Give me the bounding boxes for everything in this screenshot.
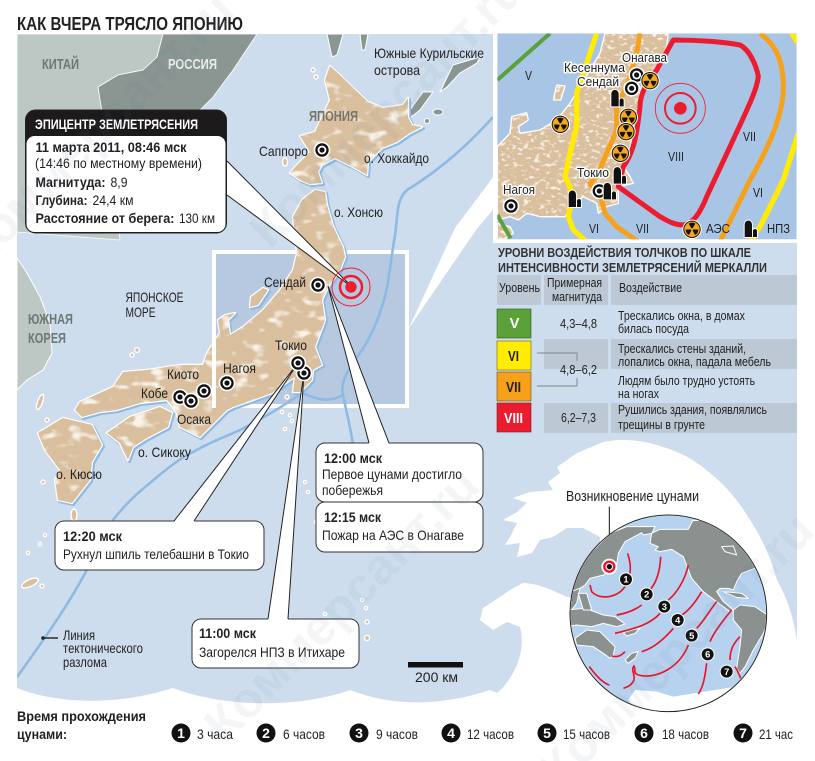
callout: epicentre: Магнитуда:	[36, 174, 106, 190]
inset labels: Кесеннума	[564, 60, 626, 75]
map labels: countries and seas: КИТАЙ	[42, 55, 79, 73]
level VII: VII	[506, 379, 521, 396]
map labels: countries and seas: ЯПОНИЯ	[309, 109, 358, 125]
inset labels: НПЗ	[767, 221, 790, 236]
legend: tectonic fault line: тектонического	[63, 640, 143, 656]
table row shading	[544, 339, 797, 433]
callout: 12:00 and 12:15 events: Пожар на АЭС в Онагаве	[322, 527, 464, 543]
level V	[497, 308, 745, 338]
panel: inset map of the epicentre region	[497, 33, 798, 242]
map labels: countries and seas: РОССИЯ	[168, 57, 217, 73]
globe badges 1-7: 6	[705, 650, 710, 660]
table header row: Уровень	[499, 280, 540, 295]
legend: 18 hours: 18 часов	[662, 726, 709, 742]
city: Нагоя: Нагоя	[223, 360, 256, 376]
callout: 11:00 event	[192, 373, 359, 668]
legend: 9 hours: 3	[355, 725, 363, 741]
legend: 18 hours: 6	[640, 725, 648, 741]
globe badges 1-7: 1	[623, 575, 629, 585]
level V: билась посуда	[618, 321, 690, 336]
map labels: countries and seas: Южные Курильские	[374, 45, 484, 61]
city markers in inset	[503, 67, 645, 214]
white frame around inset	[493, 30, 797, 243]
callout: epicentre: 11 марта 2011, 08:46 мск	[36, 139, 187, 155]
intensity zone VI	[565, 33, 798, 242]
globe heading: Возникновение цунами	[566, 489, 699, 505]
level VIII: 6,2–7,3	[561, 410, 596, 425]
panel: main map	[17, 34, 493, 677]
intensity zone V	[497, 33, 550, 238]
city: Киото: Киото	[167, 366, 199, 382]
globe badges 1-7: 7	[724, 667, 729, 677]
inset labels: VI	[589, 221, 599, 236]
table header row: магнитуда	[552, 289, 603, 304]
map labels: countries and seas: острова	[374, 62, 420, 78]
connector from frame to inset	[409, 172, 497, 328]
legend: 6 hours: 2	[262, 725, 270, 741]
bracket and shared magnitude: 4,8–6,2	[560, 362, 597, 377]
globe ocean	[567, 512, 770, 715]
inset labels: VII	[743, 129, 756, 144]
callout: epicentre: 24,4 км	[92, 192, 134, 208]
inset frame left edge	[212, 340, 216, 408]
globe badges 1-7: 2	[644, 590, 649, 600]
inset labels: Токио	[577, 165, 609, 180]
intensity zone VIII	[618, 40, 758, 225]
inset sea	[497, 33, 797, 239]
map labels: countries and seas: о. Хонсю	[334, 204, 383, 220]
city: Токио: Токио	[275, 337, 307, 353]
city: Осака	[177, 393, 211, 427]
land: Russia	[98, 34, 257, 112]
legend: 12 hours	[442, 724, 514, 742]
map labels: countries and seas: о. Сикоку	[138, 444, 191, 460]
legend: 12 hours: 4	[447, 725, 455, 741]
level VI: VI	[508, 348, 519, 365]
globe land	[567, 520, 770, 673]
city: Киото	[167, 366, 212, 399]
small islands	[20, 68, 370, 641]
globe disc	[570, 515, 767, 712]
callout: 12:20 event: 12:20 мск	[63, 528, 123, 544]
map labels: countries and seas: о. Хоккайдо	[364, 150, 429, 166]
callout: 12:00 and 12:15 events: Первое цунами достигло	[322, 466, 462, 482]
wave: white tsunami shape	[17, 440, 797, 761]
legend heading: tsunami travel time: цунами:	[17, 726, 67, 742]
inset labels: АЭС	[706, 221, 730, 236]
tectonic fault lines	[17, 117, 493, 677]
level V: V	[510, 315, 520, 332]
city: Саппоро: Саппоро	[259, 143, 308, 159]
callout: 12:20 event	[55, 363, 298, 570]
bracket and shared magnitude	[537, 353, 597, 386]
legend: 9 hours: 9 часов	[376, 726, 418, 742]
table header row: Воздействие	[619, 280, 682, 295]
land: Sakhalin and Kuril islands	[327, 34, 480, 124]
level VII: на ногах	[618, 386, 659, 401]
table heading: УРОВНИ ВОЗДЕЙСТВИЯ ТОЛЧКОВ ПО ШКАЛЕ	[498, 245, 751, 260]
level V: Трескались окна, в домах	[618, 308, 745, 323]
callout: epicentre: (14:46 по местному времени)	[35, 155, 202, 171]
legend: 9 hours	[350, 724, 418, 742]
inset labels: V	[525, 68, 532, 83]
Japan coast halo	[38, 66, 422, 503]
epicentre target	[655, 83, 705, 133]
level VII	[497, 372, 755, 401]
map labels: countries and seas: КОРЕЯ	[28, 331, 66, 347]
callout: epicentre: ЭПИЦЕНТР ЗЕМЛЕТРЯСЕНИЯ	[35, 116, 198, 132]
level VI: лопались окна, падала мебель	[618, 354, 771, 369]
city: Нагоя	[219, 360, 256, 391]
globe badges 1-7	[619, 572, 734, 679]
legend: tectonic fault line: разлома	[63, 654, 107, 670]
scale bar	[408, 662, 463, 685]
callout: 11:00 event: Загорелся НПЗ в Итихаре	[199, 644, 345, 660]
inset labels	[503, 50, 790, 236]
inset labels: Сендай	[577, 74, 619, 89]
city: Сендай	[264, 274, 326, 293]
tsunami fronts	[589, 553, 741, 694]
inset frame area	[214, 252, 407, 406]
legend heading: tsunami travel time	[17, 708, 146, 742]
legend: 21 hours: 7	[739, 725, 747, 741]
globe badges 1-7: 5	[689, 631, 694, 641]
level VII: Людям было трудно устоять	[618, 373, 755, 388]
legend: tectonic fault line: Линия	[63, 627, 95, 643]
inset labels: VI	[753, 185, 763, 200]
watermark: Коммерсант.ru	[193, 456, 490, 753]
panel: tsunami globe	[567, 507, 770, 718]
Japan coast glow	[40, 68, 424, 504]
legend: tectonic fault line	[41, 627, 143, 670]
legend: 3 hours: 3 часа	[197, 726, 233, 742]
level V: 4,3–4,8	[560, 316, 597, 331]
scale bar: 200 км	[415, 669, 458, 685]
epicentre target on main map	[332, 268, 370, 306]
callout: epicentre: Расстояние от берега:	[36, 210, 174, 226]
legend: 6 hours	[256, 724, 325, 742]
legend heading: tsunami travel time: Время прохождения	[17, 708, 146, 724]
callout: 12:00 and 12:15 events: 12:00 мск	[324, 450, 383, 466]
globe badges 1-7: 4	[675, 615, 681, 625]
level VIII: Рушились здания, появлялись	[618, 402, 767, 417]
legend: 15 hours	[538, 724, 610, 742]
callout: 12:00 and 12:15 events: 12:15 мск	[324, 509, 382, 525]
land: South Korea	[17, 258, 52, 390]
title: КАК ВЧЕРА ТРЯСЛО ЯПОНИЮ	[17, 14, 243, 34]
legend: 12 hours: 12 часов	[467, 726, 514, 742]
legend: 15 hours: 15 часов	[563, 726, 610, 742]
level VI	[497, 341, 771, 370]
legend: 21 hours: 21 час	[759, 726, 793, 742]
intensity zone VII	[590, 33, 783, 242]
land: China	[17, 34, 163, 240]
inset labels: VIII	[668, 149, 684, 164]
inset labels: Нагоя	[503, 182, 535, 197]
land: Japan islands	[38, 66, 422, 503]
map labels: countries and seas: ЯПОНСКОЕ	[126, 289, 184, 305]
table heading: ИНТЕНСИВНОСТИ ЗЕМЛЕТРЯСЕНИЙ МЕРКАЛЛИ	[498, 260, 767, 275]
level VI: Трескались стены зданий,	[618, 341, 746, 356]
callout: 11:00 event: 11:00 мск	[199, 625, 257, 641]
city: Осака: Осака	[177, 411, 211, 427]
legend: 3 hours: 1	[177, 725, 185, 741]
table header row: Примерная	[547, 275, 602, 290]
callout: epicentre: Глубина:	[36, 192, 88, 208]
map labels: countries and seas: МОРЕ	[126, 304, 156, 320]
city: Кобе	[141, 385, 188, 405]
city: Токио	[275, 337, 312, 381]
level VIII: трещины в грунте	[618, 417, 705, 432]
legend: 21 hours	[734, 724, 793, 742]
map labels: countries and seas: ЮЖНАЯ	[28, 312, 73, 328]
map labels: countries and seas	[28, 45, 484, 482]
globe Antarctica	[628, 687, 732, 711]
panel: Mercalli intensity table	[497, 245, 797, 433]
globe badges 1-7: 3	[662, 602, 667, 612]
table header row	[497, 275, 797, 305]
globe pointer line	[608, 507, 611, 560]
map labels: countries and seas: о. Кюсю	[56, 466, 102, 482]
callout: epicentre: 130 км	[179, 210, 215, 226]
legend: 18 hours	[634, 724, 709, 742]
callout: epicentre	[26, 110, 352, 287]
callout: epicentre: 8,9	[110, 174, 128, 190]
callout: 12:20 event: Рухнул шпиль телебашни в Токио	[63, 546, 249, 562]
city: Сендай: Сендай	[264, 274, 306, 290]
legend: 3 hours	[172, 724, 233, 742]
inset land	[497, 33, 668, 239]
table heading	[498, 245, 767, 275]
inset labels: Онагава	[622, 50, 668, 65]
level VIII	[497, 402, 767, 432]
callout: 12:00 and 12:15 events	[316, 286, 483, 552]
icons: nuclear plants	[551, 71, 702, 239]
icons: refineries	[569, 90, 757, 237]
inset labels: VII	[636, 221, 649, 236]
legend: 15 hours: 5	[543, 725, 551, 741]
city: Кобе: Кобе	[141, 385, 168, 401]
callout: 12:00 and 12:15 events: побережья	[322, 482, 383, 498]
level VIII: VIII	[504, 410, 523, 427]
legend: 6 hours: 6 часов	[283, 726, 325, 742]
tsunami origin marker	[601, 559, 617, 575]
